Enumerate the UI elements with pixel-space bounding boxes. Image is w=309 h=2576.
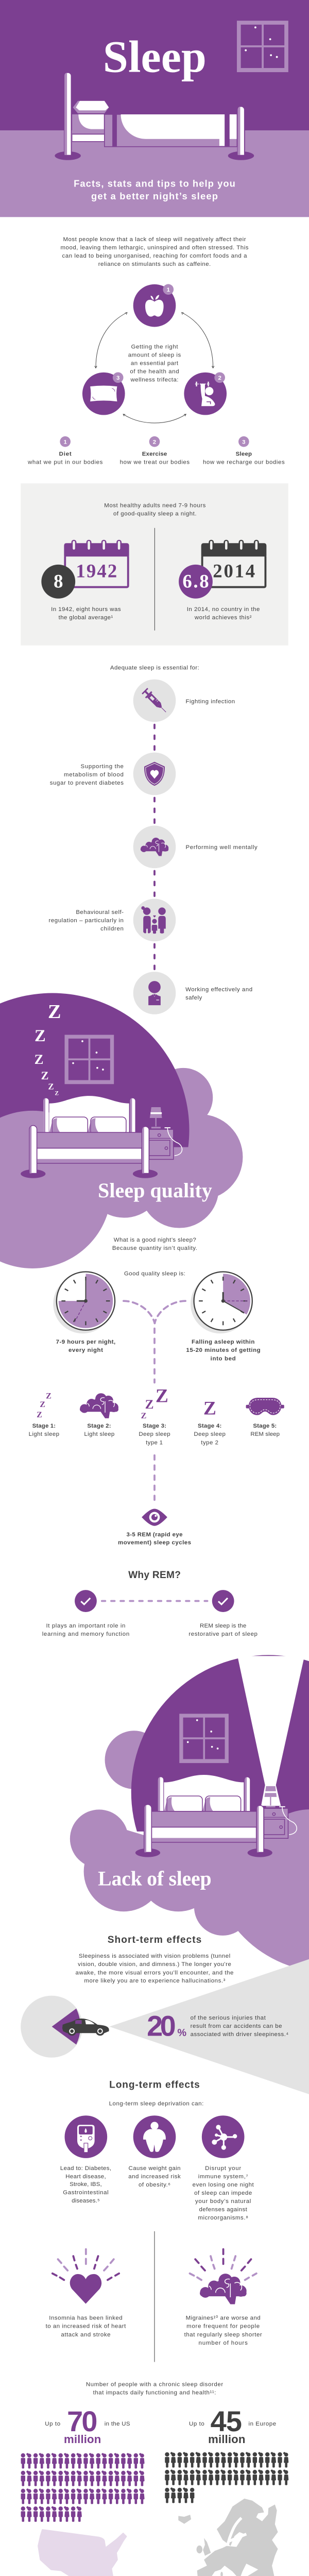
icon: glucose meter [65,2115,107,2158]
legend: sleep: Sleep [236,451,252,457]
stage 1: Z [40,1400,45,1409]
stat: 45 million in Europe [189,2405,276,2446]
stage 5: Stage 5: [253,1423,277,1429]
why REM checks [75,1590,234,1612]
text: restorative: restorative part of sleep [188,1631,258,1637]
caption 1942: the global average¹ [59,615,113,621]
legend: diet [27,436,103,466]
stage 5: REM sleep [250,1431,280,1437]
legend: sleep [203,436,285,466]
decoration: snoring Z letters [35,1001,61,1097]
stat: 20 percent: % [177,2027,186,2039]
subtitle: Facts, stats and tips to help you [74,178,235,189]
long-term: weight gain: Cause weight gain [128,2165,181,2172]
long-term: immune system: microorganisms.⁸ [198,2215,248,2221]
text: insomnia: Insomnia has been linked [49,2315,123,2321]
icon: brain with rays [190,2249,256,2304]
text: restorative: REM sleep is the [200,1623,246,1629]
text: falling asleep [186,1339,261,1362]
icon: calendar 2014: 6.8 [182,570,209,591]
text: 7-9 hours: every night [68,1347,103,1353]
icon: sleep pillow [82,372,125,415]
legend: exercise: 2 [153,439,156,445]
benefit: blood sugar: metabolism of blood [64,772,124,778]
text: chronic sleep disorder: Number of people with a chronic sleep disorder [86,2382,223,2388]
long-term: diseases: diseases.⁵ [72,2198,100,2204]
panel text: of good-quality sleep a night. [113,511,197,517]
icon: clock 15-20 minutes [191,1272,252,1333]
short-term text: more likely you are to experience hallucinations.³ [84,1978,226,1984]
benefit: behavioural self-regulation: Behavioural self- [76,909,124,916]
stage 3: Z [145,1397,153,1412]
icon: diet apple [133,284,176,327]
illustration: car headlight beam [21,1959,309,2094]
caption 2014 [187,606,260,621]
map: Europe [178,2499,278,2576]
text: insomnia: attack and stroke [61,2332,110,2338]
intro text: can lead to being unorganised, reaching for comfort foods and a [62,253,247,259]
benefit: blood sugar: Supporting the [81,764,124,770]
text: migraines [184,2315,262,2346]
text: memory function: learning and memory function [42,1631,129,1637]
decoration: snoring Z letters: Z [35,1027,46,1045]
stat: 45 million in Europe: 45 [211,2405,242,2437]
legend: sleep: 3 [242,439,246,445]
heading: why REM: Why REM? [128,1570,181,1581]
short-term text: Sleepiness is associated with vision problems (tunnel [79,1953,230,1959]
benefit: fighting infection [133,680,235,722]
long-term: weight gain [128,2165,181,2188]
intro text: reliance on stimulants such as caffeine. [98,261,211,267]
intro text: Most people know that a lack of sleep will negatively affect their [63,236,246,243]
icon: exercise weightlifter [184,372,227,415]
stage 2: Stage 2: [87,1423,111,1429]
decoration: snoring Z letters: Z [35,1052,43,1067]
decoration: snoring Z letters: Z [48,1001,61,1023]
stage 1: Z [46,1392,52,1401]
stage 1: Stage 1: [32,1423,56,1429]
legend: diet: Diet [59,451,72,457]
text: falling asleep: 15-20 minutes of getting [186,1347,261,1353]
trifecta caption: Getting the right [131,344,178,350]
illustration: single bed [55,73,254,160]
stat: 20 percent [147,2009,288,2042]
benefit: behavioural self-regulation [49,899,176,941]
text: migraines: number of hours [199,2340,248,2346]
icon: diet apple: 1 [167,287,170,293]
short-term text: awake, the more visual errors you’ll encounter, and the [76,1970,233,1976]
decoration: snoring Z letters: Z [55,1091,59,1097]
text: chronic sleep disorder [86,2382,223,2396]
icon: calendar 1942 [41,540,129,599]
text: 7-9 hours: 7-9 hours per night, [56,1339,115,1345]
long-term: immune system: Disrupt your [205,2165,241,2172]
subtitle [74,178,235,201]
short-term text [76,1953,233,1984]
decoration: snoring Z letters: Z [41,1069,48,1082]
long-term: diseases: Gastrointestinal [63,2190,109,2196]
stage 3: Z [141,1412,146,1420]
stage 4: Stage 4: [198,1423,221,1429]
stat: 20 percent: 20 [147,2009,176,2042]
benefit: working effectively: safely [185,995,202,1001]
icon: obesity figure [133,2115,176,2158]
long-term: immune system: even losing one night [193,2182,254,2188]
long-term: diseases: Heart disease, [65,2174,106,2180]
stage 1: Z [37,1411,42,1419]
benefit: working effectively [133,972,252,1014]
benefit: blood sugar [50,753,176,795]
stage 4: Z [203,1398,216,1419]
long-term: immune system: your body’s natural [195,2198,251,2205]
icon: night window [237,21,288,72]
text: migraines: more frequent for people [186,2324,260,2330]
title: Sleep [103,32,207,82]
stat: 45 million in Europe: in Europe [249,2421,276,2427]
caption 1942: In 1942, eight hours was [51,606,121,613]
trifecta caption [128,344,181,383]
REM cycles: 3-5 REM (rapid eye [126,1532,183,1538]
intro text [60,236,249,267]
long-term: immune system [193,2165,254,2221]
text: chronic sleep disorder: that impacts daily functioning and health¹¹: [93,2390,216,2396]
long-term: immune system: immune system,⁷ [198,2174,248,2180]
panel: sleep quality illustration [0,993,243,1268]
text: insomnia: to an increased risk of heart [46,2324,126,2330]
text: falling asleep: into bed [211,1355,236,1362]
benefit: behavioural self-regulation: regulation – particularly in [49,918,124,924]
legend: diet: what we put in our bodies [27,460,103,466]
pictogram: Europe people [165,2452,288,2503]
pictogram: US people [21,2453,145,2522]
text: migraines: that regularly sleep shorter [184,2332,262,2338]
text: restorative [188,1623,258,1637]
stage 2 [80,1393,118,1437]
long-term: diseases [60,2165,111,2204]
stage 4: Deep sleep [194,1431,226,1437]
icon: car [62,2019,109,2036]
icon: calendar 2014 [179,540,266,599]
stage 2: Light sleep [84,1431,114,1437]
long-term: diseases: Stroke, IBS, [70,2181,102,2188]
intro: good night's sleep [112,1237,197,1251]
benefit: blood sugar: sugar to prevent diabetes [50,780,124,786]
long-term: immune system: of sleep can impede [194,2190,252,2196]
panel: lack of sleep illustration [70,1655,309,1972]
panel text: Most healthy adults need 7-9 hours [104,503,206,509]
stat: 20 percent: associated with driver sleepiness.⁴ [191,2031,288,2038]
text: insomnia [46,2315,126,2338]
heading: short-term effects: Short-term effects [108,1935,201,1945]
panel: header [0,0,309,217]
legend: diet: 1 [63,439,67,445]
stage 1: Light sleep [29,1431,59,1437]
REM cycles: movement) sleep cycles [118,1540,191,1546]
stage 4 [194,1398,226,1446]
stat: 70 million in the US: million [64,2433,101,2446]
icon: heart with rays [53,2249,119,2304]
long-term: diseases: Lead to: Diabetes, [60,2165,111,2172]
stat: 45 million in Europe: Up to [189,2421,204,2427]
icon: calendar 1942: 8 [54,570,63,591]
stat: 70 million in the US: 70 [67,2405,97,2437]
long-term intro: Long-term sleep deprivation can: [109,2101,203,2107]
REM cycles [118,1509,191,1546]
stage 1 [29,1392,59,1437]
panel text [104,503,206,517]
intro text: mood, leaving them lethargic, uninspired and often stressed. This [60,245,249,251]
text: memory function: It plays an important role in [46,1623,125,1629]
label: good quality sleep: Good quality sleep is: [124,1271,185,1277]
text: 7-9 hours [56,1339,115,1353]
stat: 45 million in Europe: million [208,2433,245,2446]
subtitle: get a better night’s sleep [91,191,218,201]
long-term: weight gain: and increased risk [128,2174,181,2180]
heading: sleep quality: Sleep quality [98,1179,212,1202]
text: migraines: Migraines¹⁰ are worse and [186,2315,261,2321]
trifecta caption: of the health and [130,368,179,375]
arrows between circles [95,313,214,423]
legend: exercise [120,436,190,466]
benefit: behavioural self-regulation: children [100,926,124,932]
icon: calendar 1942: 1942 [76,560,117,581]
stage 5 [246,1398,284,1437]
decoration: snoring Z letters: Z [48,1082,54,1092]
caption 1942 [51,606,121,621]
icon: exercise weightlifter: 2 [218,375,221,381]
stat: 70 million in the US [45,2405,130,2446]
icon: clock 7-9 hours [53,1272,115,1333]
benefit: performing well mentally [133,826,258,868]
stat: 70 million in the US: Up to [45,2421,60,2427]
intro: good night's sleep: What is a good night’s sleep? [114,1237,196,1243]
caption 2014: world achieves this² [194,615,252,621]
stat: 20 percent: of the serious injuries that [191,2015,266,2021]
stage 3: Z [156,1385,168,1406]
stage 4: type 2 [201,1439,218,1446]
heading: long-term effects: Long-term effects [109,2079,200,2090]
short-term text: vision, double vision, and dimness.) The longer you’re [78,1961,231,1968]
trifecta caption: wellness trifecta: [130,377,178,383]
heading: lack of sleep: Lack of sleep [98,1867,212,1890]
heading: adequate sleep: Adequate sleep is essential for: [110,665,199,671]
stage 3: Stage 3: [143,1423,166,1429]
stat: 70 million in the US: in the US [105,2421,130,2427]
map: USA [38,2530,126,2576]
icon: immune cell [202,2115,244,2158]
benefit: performing well mentally: Performing well mentally [185,844,258,851]
stage 3: type 1 [146,1439,163,1446]
stage 3: Deep sleep [139,1431,170,1437]
text: memory function [42,1623,129,1637]
intro: good night's sleep: Because quantity isn’t quality. [112,1245,197,1251]
stat: 20 percent: result from car accidents can be [191,2023,282,2029]
icon: sleep pillow: 3 [116,375,119,381]
icon: calendar 2014: 2014 [213,560,255,581]
dashed connector [152,725,157,970]
caption 2014: In 2014, no country in the [187,606,260,613]
long-term: weight gain: of obesity.⁶ [139,2182,170,2188]
text: falling asleep: Falling asleep within [192,1339,254,1345]
benefit: fighting infection: Fighting infection [185,699,235,705]
legend: exercise: Exercise [142,451,167,457]
benefit: working effectively: Working effectively and [185,987,252,993]
long-term: immune system: defenses against [199,2207,248,2213]
legend: exercise: how we treat our bodies [120,460,190,466]
panel: hours of sleep then and now [21,483,288,646]
stage 3 [139,1385,170,1446]
trifecta caption: an essential part [131,361,179,367]
legend: sleep: how we recharge our bodies [203,460,285,466]
diagram: health and wellness trifecta [21,284,288,646]
dashed connectors [124,1301,185,1500]
trifecta caption: amount of sleep is [128,352,181,359]
